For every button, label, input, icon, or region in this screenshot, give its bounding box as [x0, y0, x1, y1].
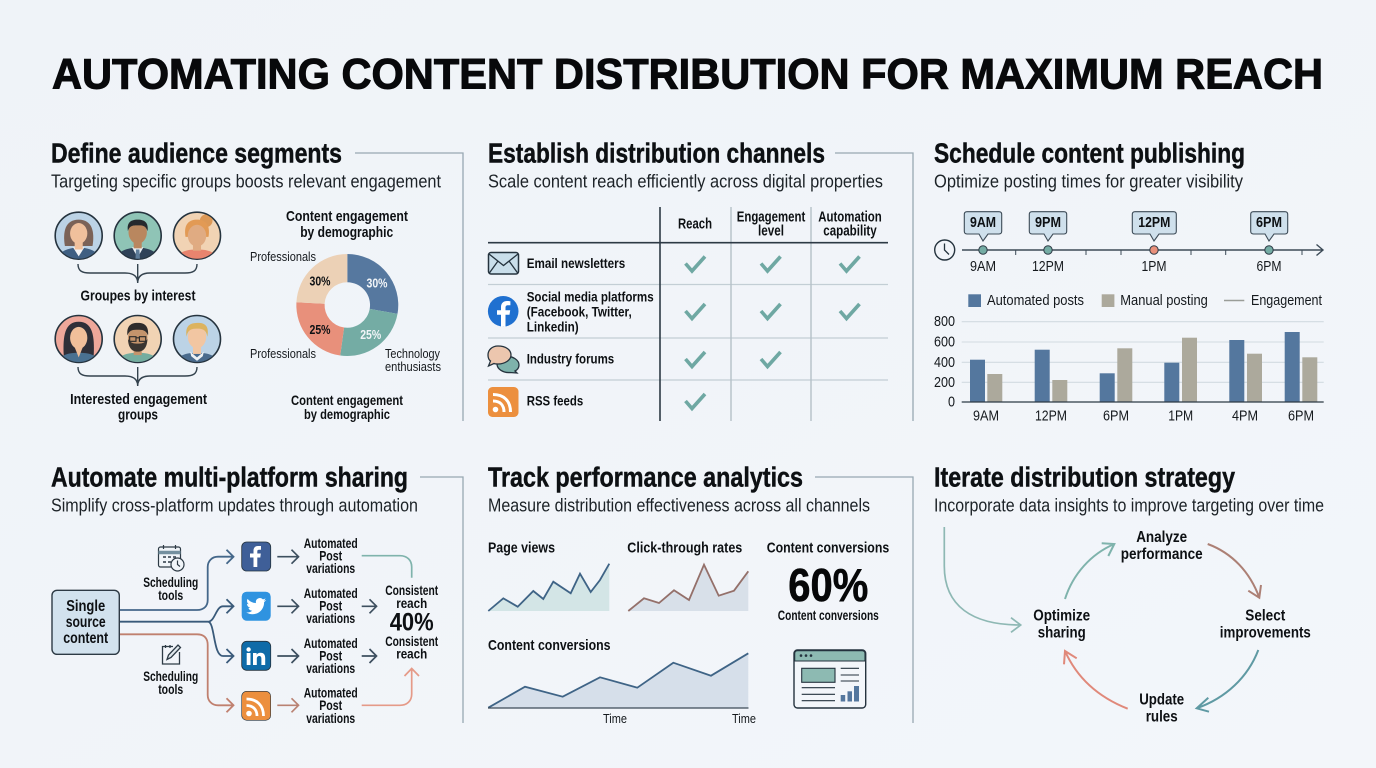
callout: 12PM [1132, 212, 1176, 241]
label: post variations facebook: Automated [304, 536, 358, 551]
timeline axis [962, 244, 1323, 256]
bar chart: 400 [934, 354, 955, 371]
arrows: variations to consistent reach [362, 556, 419, 705]
icon: calendar with clock [158, 545, 184, 571]
step: analyze performance: performance [1121, 546, 1203, 563]
row label: social media platforms [527, 290, 654, 334]
panel: automate multi-platform sharing [51, 462, 463, 726]
chart legend: Automated posts [987, 292, 1084, 309]
label: post variations twitter: Automated [304, 586, 358, 601]
arrow: source to rss [120, 634, 234, 712]
subheading: Optimize posting times for greater visibility [934, 170, 1244, 192]
stat: consistent reach 40% [385, 583, 438, 662]
step: optimize sharing: sharing [1038, 624, 1086, 642]
area chart: content conversions: Time [732, 711, 756, 726]
avatar: blond man [174, 316, 220, 368]
donut chart: 25% [360, 327, 382, 342]
callout: 12PM: 12PM [1138, 215, 1170, 231]
heading: Automate multi-platform sharing [51, 462, 408, 492]
label: page views: Page views [488, 540, 555, 556]
arrow: optimize to analyze [1065, 543, 1114, 599]
table header: Engagement [737, 208, 805, 226]
arrow: select to update [1197, 650, 1258, 712]
heading: Track performance analytics [488, 462, 803, 492]
table header: level [758, 222, 784, 240]
chart title: content engagement by demographic: by demographic [300, 224, 393, 241]
donut label: technology enthusiasts [385, 346, 441, 374]
bar chart: 6PM [1288, 408, 1314, 424]
callout: 9PM: 9PM [1035, 215, 1061, 231]
label: post variations facebook: Post [319, 548, 343, 564]
chart legend [968, 292, 1323, 309]
connector line [835, 153, 913, 421]
callout: 9PM [1029, 212, 1067, 241]
row label: rss feeds: RSS feeds [527, 394, 583, 408]
callout: 6PM: 6PM [1256, 215, 1282, 231]
arrow: update to optimize [1064, 651, 1128, 709]
sparkline: click-through rates [628, 565, 748, 611]
label: interested engagement groups: groups [118, 406, 158, 424]
bar chart: 6PM [1103, 408, 1129, 424]
subheading: Simplify cross-platform updates through automation [51, 494, 418, 516]
row label: social media platforms: (Facebook, Twitter, [527, 304, 632, 320]
bar chart [934, 313, 1324, 424]
donut chart: 30% [310, 274, 331, 288]
arrow: analyze to select [1208, 544, 1261, 598]
label: scheduling tools bottom: tools [158, 682, 183, 697]
label: scheduling tools bottom: Scheduling [143, 669, 198, 684]
icon: twitter [242, 592, 271, 621]
table header: Automation [818, 208, 882, 226]
label: interested engagement groups: Interested engagement [70, 391, 207, 408]
bar chart: 12PM [1035, 408, 1067, 424]
stat: consistent reach 40%: reach [396, 596, 427, 611]
step: select improvements [1220, 608, 1311, 642]
bar chart: 200 [934, 374, 955, 391]
chart legend: Engagement [1251, 292, 1323, 309]
area chart: content conversions [488, 653, 756, 726]
subheading: Measure distribution effectiveness across all channels [488, 494, 870, 516]
chart legend: Manual posting [1120, 292, 1208, 309]
icon: linkedin [242, 641, 271, 670]
subheading: Incorporate data insights to improve targeting over time [934, 494, 1324, 516]
callout: 6PM [1251, 212, 1288, 241]
step: update rules: rules [1146, 708, 1178, 726]
avatar: man in suit [114, 212, 161, 264]
icon: clock [935, 240, 955, 260]
icon: rss [488, 387, 518, 417]
label: groupes by interest: Groupes by interest [80, 288, 196, 304]
icon: checklist with pencil [162, 645, 180, 664]
heading: Establish distribution channels [488, 138, 825, 168]
row label: industry forums: Industry forums [527, 352, 614, 366]
bracket: bottom group [78, 367, 197, 386]
connector line [815, 477, 913, 723]
avatar: woman with bun [174, 212, 220, 264]
label: post variations rss [304, 686, 358, 726]
callout: 9AM [964, 212, 1002, 241]
icon: chat bubbles [488, 346, 519, 373]
stat: consistent reach 40%: reach [396, 646, 427, 662]
chart caption: by demographic [304, 407, 390, 422]
avatar: man with beard and glasses [114, 316, 161, 368]
label: post variations linkedin: variations [306, 661, 355, 676]
bar chart: 0 [948, 394, 955, 410]
label: click-through rates: Click-through rates [627, 540, 742, 556]
panel: track performance analytics [488, 462, 913, 726]
check marks [686, 256, 860, 408]
icon: rss [242, 691, 271, 720]
row label: email newsletters: Email newsletters [527, 256, 625, 271]
table header: capability [823, 222, 877, 240]
timeline labels: 6PM [1256, 259, 1282, 275]
step: optimize sharing: Optimize [1033, 608, 1091, 624]
sparkline: page views [488, 564, 609, 611]
step: optimize sharing [1033, 608, 1091, 642]
stat: consistent reach 40%: Consistent [385, 634, 438, 649]
label: post variations twitter [304, 586, 358, 626]
donut label: technology enthusiasts: Technology [385, 346, 440, 361]
label: content conversions chart: Content conversions [488, 637, 610, 654]
label: scheduling tools top: Scheduling [143, 575, 198, 590]
icon: facebook [242, 542, 271, 571]
timeline labels: 12PM [1032, 259, 1064, 275]
arrow: intake to cycle [944, 527, 1021, 632]
timeline labels: 1PM [1142, 259, 1166, 275]
label: post variations linkedin: Automated [304, 636, 358, 651]
source box: content [63, 630, 108, 647]
label: content conversions caption: Content conversions [778, 608, 879, 623]
panel: iterate distribution strategy [934, 462, 1324, 726]
bracket: top group [78, 264, 197, 283]
step: select improvements: Select [1245, 608, 1285, 624]
title: AUTOMATING CONTENT DISTRIBUTION FOR MAXIMUM REACH [52, 52, 1323, 98]
bar chart: 800 [934, 313, 955, 330]
bar chart: 4PM [1232, 408, 1258, 424]
heading: Define audience segments [51, 138, 342, 168]
source box: Single [66, 598, 106, 615]
stat: consistent reach 40%: 40% [390, 609, 434, 637]
timeline labels [970, 259, 1282, 275]
avatar: woman with long hair [55, 316, 102, 368]
label: scheduling tools top: tools [158, 588, 183, 603]
table grid [488, 207, 888, 421]
arrow: source to twitter and linkedin [120, 599, 234, 663]
table header: Reach [678, 216, 712, 232]
heading: Schedule content publishing [934, 138, 1245, 168]
step: select improvements: improvements [1220, 624, 1311, 642]
arrow: source to facebook [120, 550, 234, 610]
label: post variations twitter: variations [306, 611, 355, 626]
label: post variations twitter: Post [319, 598, 343, 614]
timeline markers [979, 246, 1273, 254]
label: scheduling tools top [143, 575, 198, 603]
label: scheduling tools bottom [143, 669, 198, 697]
label: post variations rss: variations [306, 711, 355, 726]
label: post variations rss: Automated [304, 686, 358, 700]
donut label: technology enthusiasts: enthusiasts [385, 359, 441, 374]
arrows: platforms to post variations [277, 550, 298, 712]
chart caption [291, 393, 403, 422]
connector line [420, 477, 463, 723]
icon: envelope [488, 252, 518, 274]
donut chart: 30% [366, 276, 388, 290]
donut label: professionals bottom: Professionals [250, 346, 316, 361]
label: content conversions header: Content conversions [767, 540, 889, 556]
label: interested engagement groups [70, 391, 207, 424]
timeline labels: 9AM [970, 259, 996, 275]
donut chart: 25% [310, 322, 331, 337]
bar chart: 9AM [973, 408, 999, 424]
chart caption: Content engagement [291, 393, 403, 408]
callout: 9AM: 9AM [970, 215, 996, 231]
source box: source [66, 614, 106, 631]
label: post variations linkedin: Post [319, 648, 343, 664]
panel: establish distribution channels [488, 138, 913, 421]
connector line [355, 153, 463, 421]
row label: social media platforms: Linkedin) [527, 320, 579, 334]
subheading: Scale content reach efficiently across digital properties [488, 170, 883, 192]
stat: consistent reach 40%: Consistent [385, 583, 438, 598]
panel: schedule content publishing [934, 138, 1324, 424]
bar chart: 1PM [1168, 408, 1193, 424]
label: post variations facebook: variations [306, 561, 355, 576]
subheading: Targeting specific groups boosts relevant engagement [51, 170, 441, 192]
heading: Iterate distribution strategy [934, 462, 1235, 492]
bar chart: 600 [934, 334, 955, 350]
panel: define audience segments [51, 138, 463, 424]
chart title: content engagement by demographic: Content engagement [286, 208, 408, 225]
row label: social media platforms: Social media platforms [527, 290, 654, 304]
icon: facebook [488, 296, 518, 327]
step: update rules: Update [1139, 692, 1185, 708]
step: update rules [1139, 692, 1185, 726]
area chart: content conversions: Time [603, 711, 627, 726]
label: post variations rss: Post [319, 698, 343, 713]
step: analyze performance: Analyze [1136, 529, 1188, 546]
source box [52, 590, 119, 654]
chart title: content engagement by demographic [286, 208, 408, 241]
table header [678, 208, 882, 240]
stat: 60%: 60% [788, 559, 868, 611]
label: post variations facebook [304, 536, 358, 576]
donut chart [296, 254, 398, 356]
icon: analytics dashboard browser [794, 650, 866, 708]
step: analyze performance [1121, 529, 1203, 563]
donut label: professionals top: Professionals [250, 249, 316, 264]
avatar: woman in blazer [55, 212, 102, 264]
label: post variations linkedin [304, 636, 358, 676]
